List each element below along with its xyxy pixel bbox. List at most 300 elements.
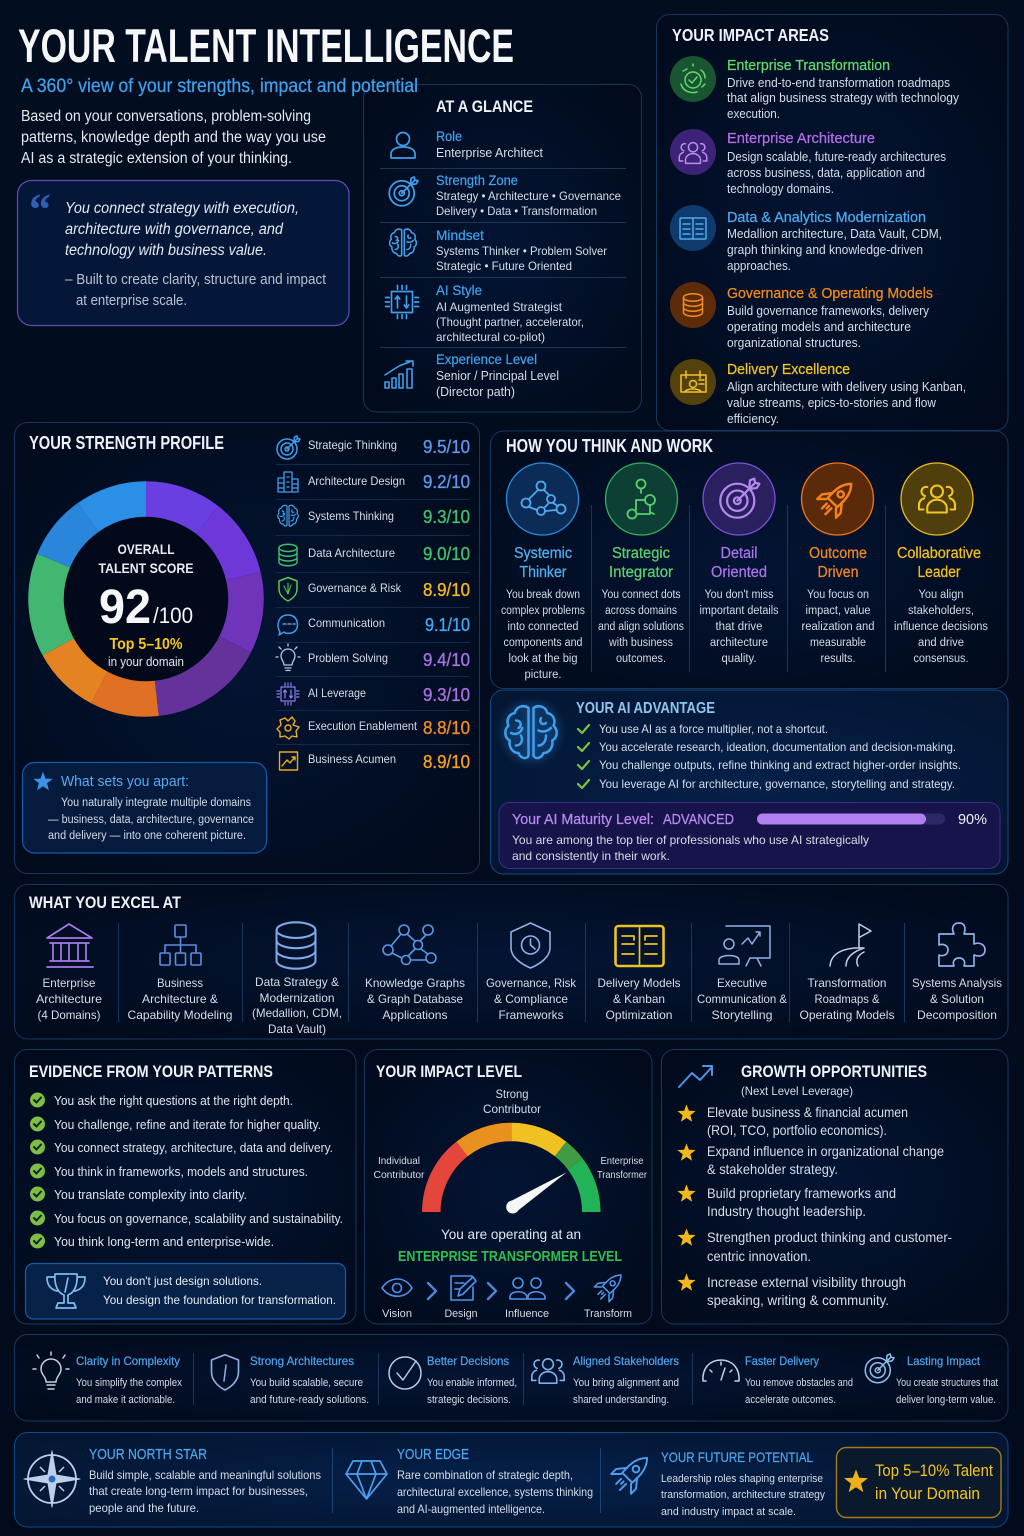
text: enterprise transformation bbox=[727, 57, 960, 121]
text: data strategy: Data Strategy & bbox=[255, 975, 339, 989]
text: executive communication: Storytelling bbox=[712, 1008, 772, 1022]
callout text: — business, data, architecture, governance bbox=[48, 814, 254, 826]
subheading: (Next Level Leverage) bbox=[741, 1084, 853, 1098]
text: future potential: Leadership roles shaping enterprise bbox=[661, 1473, 823, 1485]
text: experience level: Senior / Principal Level bbox=[436, 369, 559, 383]
text: aligned stakeholders bbox=[573, 1354, 679, 1406]
text: enterprise architecture: Enterprise bbox=[42, 976, 96, 990]
panel: at a glance bbox=[364, 84, 642, 412]
growth list: Build proprietary frameworks and bbox=[707, 1185, 896, 1201]
icon: database bbox=[277, 922, 315, 969]
icon: detail oriented bbox=[703, 463, 775, 535]
text: outcome driven: results. bbox=[820, 653, 856, 665]
icon: vision bbox=[382, 1279, 412, 1296]
text: strategic integrator: outcomes. bbox=[616, 653, 666, 665]
text: detail oriented: Oriented bbox=[711, 564, 767, 581]
text: collaborative leader: stakeholders, bbox=[908, 605, 974, 617]
text: strength zone: Strength Zone bbox=[436, 172, 518, 188]
heading: GROWTH OPPORTUNITIES bbox=[741, 1062, 927, 1081]
text: governance risk: Frameworks bbox=[498, 1008, 564, 1022]
callout text: You naturally integrate multiple domains bbox=[61, 797, 251, 809]
text: mindset bbox=[436, 227, 607, 273]
text: strategic integrator: You connect dots bbox=[602, 589, 681, 601]
heading: YOUR IMPACT AREAS bbox=[672, 25, 829, 45]
text: north star: people and the future. bbox=[89, 1501, 199, 1515]
ai maturity box bbox=[499, 802, 1000, 868]
icon: org chart bbox=[160, 925, 201, 965]
icon: governance shield bbox=[511, 923, 550, 968]
text: experience level: (Director path) bbox=[436, 385, 515, 399]
heading: YOUR STRENGTH PROFILE bbox=[29, 433, 224, 453]
heading: YOUR AI ADVANTAGE bbox=[576, 700, 715, 717]
icon: target bbox=[865, 1354, 894, 1383]
text: governance: organizational structures. bbox=[727, 336, 861, 350]
callout text bbox=[48, 773, 254, 842]
quote text: technology with business value. bbox=[65, 242, 267, 259]
level statement: You are operating at an bbox=[441, 1226, 581, 1242]
icon: systemic thinker bbox=[506, 463, 578, 535]
score row: execution enablement bbox=[277, 717, 470, 739]
text: systemic thinker: complex problems bbox=[501, 605, 585, 617]
text: enterprise architecture: Design scalable, future-ready architectures bbox=[727, 150, 946, 164]
icon: quote mark: “ bbox=[29, 185, 51, 234]
text: business architecture: Capability Modeling bbox=[128, 1008, 232, 1022]
icon: star bbox=[33, 772, 53, 790]
intro text: Based on your conversations, problem-solving bbox=[21, 108, 311, 125]
intro text: patterns, knowledge depth and the way you use bbox=[21, 129, 326, 146]
text: enterprise transformation: execution. bbox=[727, 107, 780, 121]
text: business architecture: Architecture & bbox=[142, 992, 218, 1006]
badge: top talent bbox=[836, 1448, 1001, 1518]
panel: benefits strip bbox=[14, 1334, 1008, 1421]
text: future potential: YOUR FUTURE POTENTIAL bbox=[661, 1449, 813, 1465]
text: faster delivery: You remove obstacles and bbox=[745, 1377, 853, 1389]
text: delivery bbox=[727, 361, 966, 426]
icon: collaborative leader bbox=[901, 463, 973, 535]
text: outcome driven: Driven bbox=[818, 564, 858, 581]
heading: HOW YOU THINK AND WORK bbox=[506, 436, 713, 456]
text: enterprise transformation: Drive end-to-end transformation roadmaps bbox=[727, 76, 950, 90]
evidence list: You think long-term and enterprise-wide. bbox=[54, 1235, 274, 1249]
text: experience level bbox=[436, 351, 559, 399]
growth list: (ROI, TCO, portfolio economics). bbox=[707, 1122, 887, 1138]
text: delivery models: & Kanban bbox=[613, 992, 665, 1006]
text: detail oriented: quality. bbox=[722, 653, 756, 665]
icon: influence bbox=[510, 1278, 545, 1299]
text: collaborative leader bbox=[894, 545, 988, 665]
gauge labels: Transformer bbox=[597, 1169, 647, 1181]
text: governance: Build governance frameworks, delivery bbox=[727, 304, 930, 318]
score: overall: TALENT SCORE bbox=[98, 560, 194, 576]
text: future potential: transformation, architecture strategy bbox=[661, 1489, 825, 1501]
icon: diamond bbox=[346, 1461, 387, 1499]
icon: design bbox=[451, 1276, 476, 1300]
growth list: Expand influence in organizational change bbox=[707, 1143, 944, 1159]
text: delivery models bbox=[598, 976, 680, 1022]
score row: business acumen: Business Acumen bbox=[308, 752, 396, 766]
icon: target bbox=[389, 177, 418, 206]
gauge labels: Contributor bbox=[483, 1102, 541, 1116]
icon: star bbox=[844, 1469, 868, 1492]
text: outcome driven: impact, value bbox=[806, 605, 870, 617]
gauge labels: Contributor bbox=[374, 1169, 425, 1181]
text: detail oriented: important details bbox=[700, 605, 779, 617]
badge text: in Your Domain bbox=[875, 1484, 980, 1503]
score row: execution enablement: Execution Enablement bbox=[308, 719, 418, 733]
panel: strength profile bbox=[14, 422, 480, 874]
text: better decisions: strategic decisions. bbox=[427, 1394, 511, 1406]
ai maturity box: and consistently in their work. bbox=[512, 849, 670, 863]
score row: business acumen: 8.9/10 bbox=[423, 752, 470, 772]
callout text bbox=[103, 1274, 336, 1307]
ai maturity box: ADVANCED bbox=[663, 811, 734, 828]
text: clarity: Clarity in Complexity bbox=[76, 1354, 180, 1368]
text: data analytics: graph thinking and knowledge-driven bbox=[727, 243, 923, 257]
score: overall: Top 5–10% bbox=[110, 636, 182, 653]
text: strategic integrator: Strategic bbox=[612, 545, 670, 562]
arrow bbox=[488, 1283, 496, 1299]
icon: growth arrow bbox=[679, 1066, 712, 1087]
score row: architecture design: Architecture Design bbox=[308, 474, 405, 488]
evidence list: You connect strategy, architecture, data and delivery. bbox=[54, 1141, 333, 1155]
text: ai style: AI Augmented Strategist bbox=[436, 300, 563, 314]
donut chart bbox=[46, 499, 246, 699]
text: faster delivery: accelerate outcomes. bbox=[745, 1394, 836, 1406]
advantage list: You use AI as a force multiplier, not a shortcut. bbox=[599, 722, 828, 736]
text: delivery: Align architecture with delivery using Kanban, bbox=[727, 380, 966, 394]
growth list: speaking, writing & community. bbox=[707, 1292, 889, 1308]
icon: architecture bbox=[670, 129, 716, 175]
step labels bbox=[382, 1308, 632, 1320]
text: systems analysis: Systems Analysis bbox=[912, 976, 1002, 990]
level statement: ENTERPRISE TRANSFORMER LEVEL bbox=[398, 1248, 622, 1265]
text: strategic integrator bbox=[598, 545, 684, 665]
text: north star: YOUR NORTH STAR bbox=[89, 1446, 207, 1463]
text: systemic thinker: components and bbox=[504, 637, 582, 649]
text: faster delivery bbox=[745, 1354, 853, 1406]
text: role bbox=[436, 128, 544, 160]
text: lasting impact: Lasting Impact bbox=[907, 1354, 981, 1368]
ai maturity box: You are among the top tier of professionals who use AI strategically bbox=[512, 833, 869, 847]
text: collaborative leader: influence decisions bbox=[894, 621, 988, 633]
callout text: What sets you apart: bbox=[61, 773, 189, 790]
title: YOUR TALENT INTELLIGENCE bbox=[18, 19, 514, 72]
panel: ai advantage bbox=[490, 690, 1008, 874]
icon: puzzle bbox=[939, 923, 985, 966]
text: enterprise architecture bbox=[36, 976, 102, 1022]
text: role: Enterprise Architect bbox=[436, 146, 544, 160]
text: delivery: efficiency. bbox=[727, 412, 779, 426]
callout text: and delivery — into one coherent picture. bbox=[48, 830, 246, 842]
icon: shield bbox=[212, 1355, 238, 1390]
score: overall: in your domain bbox=[108, 654, 184, 669]
icon: strategic integrator bbox=[606, 463, 678, 535]
panel: impact areas bbox=[656, 14, 1008, 430]
icon: outcome driven bbox=[802, 463, 874, 535]
growth list: Increase external visibility through bbox=[707, 1274, 906, 1290]
growth list: & stakeholder strategy. bbox=[707, 1161, 838, 1177]
text: enterprise architecture: Enterprise Architecture bbox=[727, 130, 875, 147]
text: transformation roadmaps: Operating Models bbox=[800, 1008, 894, 1022]
text: your edge: and AI-augmented intelligence. bbox=[397, 1502, 545, 1516]
text: future potential bbox=[661, 1449, 825, 1518]
gauge labels: Individual bbox=[378, 1155, 420, 1167]
quote text bbox=[65, 200, 299, 259]
text: delivery: value streams, epics-to-stories and flow bbox=[727, 396, 937, 410]
text: collaborative leader: Collaborative bbox=[897, 545, 981, 562]
score row: ai leverage: 9.3/10 bbox=[423, 685, 470, 705]
score row: problem solving bbox=[276, 644, 470, 670]
advantage list bbox=[599, 722, 961, 791]
subtitle: A 360° view of your strengths, impact and potential bbox=[21, 75, 418, 97]
text: collaborative leader: Leader bbox=[918, 564, 960, 581]
text: transformation roadmaps: Transformation bbox=[808, 976, 886, 990]
text: aligned stakeholders: Aligned Stakeholders bbox=[573, 1354, 679, 1368]
text: mindset: Systems Thinker • Problem Solver bbox=[436, 244, 607, 258]
growth list: Industry thought leadership. bbox=[707, 1203, 866, 1219]
ai maturity box: Your AI Maturity Level: bbox=[512, 811, 654, 828]
text: data analytics: Data & Analytics Modernization bbox=[727, 209, 926, 226]
text: experience level: Experience Level bbox=[436, 351, 537, 367]
text: your edge: Rare combination of strategic depth, bbox=[397, 1468, 573, 1482]
text: detail oriented: that drive bbox=[716, 621, 762, 633]
text: delivery: Delivery Excellence bbox=[727, 361, 850, 378]
heading: YOUR IMPACT LEVEL bbox=[376, 1062, 522, 1081]
text: ai style: AI Style bbox=[436, 282, 482, 298]
text: systemic thinker: into connected bbox=[508, 621, 578, 633]
text: role: Role bbox=[436, 128, 462, 144]
quote attribution bbox=[65, 272, 326, 309]
text: lasting impact bbox=[896, 1354, 998, 1406]
text: collaborative leader: You align bbox=[918, 589, 964, 601]
text: business architecture: Business bbox=[157, 976, 203, 990]
text: ai style bbox=[436, 282, 584, 344]
score row: problem solving: Problem Solving bbox=[308, 651, 388, 665]
text: your edge: YOUR EDGE bbox=[397, 1446, 469, 1463]
text: future potential: and industry impact at scale. bbox=[661, 1506, 796, 1518]
quote text: You connect strategy with execution, bbox=[65, 200, 299, 217]
panel: how you think and work bbox=[490, 431, 1008, 688]
score row: communication: Communication bbox=[308, 616, 385, 630]
quote attribution: – Built to create clarity, structure and impact bbox=[65, 272, 326, 288]
panel: impact level bbox=[364, 1050, 652, 1324]
text: detail oriented: Detail bbox=[720, 545, 758, 562]
text: enterprise transformation: Enterprise Transformation bbox=[727, 57, 890, 74]
score row: ai leverage: AI Leverage bbox=[308, 686, 366, 700]
text: data strategy bbox=[252, 975, 342, 1036]
text: executive communication: Communication & bbox=[697, 992, 787, 1006]
text: data strategy: (Medallion, CDM, bbox=[252, 1006, 342, 1020]
evidence list: You focus on governance, scalability and sustainability. bbox=[54, 1212, 343, 1226]
text: data analytics bbox=[727, 209, 942, 273]
text: systems analysis: & Solution bbox=[930, 992, 984, 1006]
text: mindset: Strategic • Future Oriented bbox=[436, 259, 572, 273]
text: north star: that create long-term impact for businesses, bbox=[89, 1484, 308, 1498]
callout text: You design the foundation for transformation. bbox=[103, 1293, 336, 1307]
text: executive communication bbox=[697, 976, 787, 1022]
text: aligned stakeholders: shared understanding. bbox=[573, 1394, 669, 1406]
icon: check circle bbox=[389, 1357, 421, 1389]
text: enterprise architecture bbox=[727, 130, 946, 196]
icon: presenter bbox=[719, 926, 770, 966]
text: strength zone bbox=[436, 172, 621, 218]
text: governance: Governance & Operating Models bbox=[727, 285, 933, 302]
text: aligned stakeholders: You bring alignment and bbox=[573, 1377, 679, 1389]
text: knowledge graphs: Knowledge Graphs bbox=[365, 976, 465, 990]
evidence list: You translate complexity into clarity. bbox=[54, 1188, 247, 1202]
score row: strategic thinking bbox=[277, 436, 470, 459]
score row: data architecture: 9.0/10 bbox=[423, 544, 470, 564]
score row: communication bbox=[278, 615, 470, 635]
text: detail oriented bbox=[700, 545, 779, 665]
score row: governance and risk: 8.9/10 bbox=[423, 580, 470, 600]
score: overall: OVERALL bbox=[118, 541, 175, 557]
text: north star bbox=[89, 1446, 321, 1515]
text: strength zone: Strategy • Architecture • Governance bbox=[436, 189, 621, 203]
score row: strategic thinking: 9.5/10 bbox=[423, 437, 470, 457]
icon: governance bbox=[670, 282, 716, 328]
icon: rocket bbox=[607, 1448, 657, 1498]
text: systems analysis: Decomposition bbox=[917, 1008, 997, 1022]
text: outcome driven: Outcome bbox=[809, 545, 867, 562]
icon: transform bbox=[592, 1268, 628, 1304]
score row: systems thinking bbox=[278, 505, 470, 527]
text: enterprise architecture: technology domains. bbox=[727, 182, 834, 196]
text: strategic integrator: and align solutions bbox=[598, 621, 684, 633]
arrow bbox=[428, 1283, 436, 1299]
text: systemic thinker: picture. bbox=[524, 669, 562, 681]
gauge labels: Strong bbox=[496, 1087, 528, 1101]
icon: brain bbox=[390, 229, 416, 256]
score row: governance and risk: Governance & Risk bbox=[308, 581, 402, 595]
icon: trophy bbox=[47, 1274, 85, 1308]
text: north star: Build simple, scalable and meaningful solutions bbox=[89, 1468, 321, 1482]
advantage list: You leverage AI for architecture, governance, storytelling and strategy. bbox=[599, 777, 955, 791]
step labels: Influence bbox=[505, 1308, 549, 1320]
text: data analytics: approaches. bbox=[727, 259, 791, 273]
text: collaborative leader: and drive bbox=[918, 637, 964, 649]
progress bar bbox=[757, 814, 945, 824]
text: strong architectures: and future-ready solutions. bbox=[250, 1394, 369, 1406]
icon: data analytics bbox=[670, 205, 716, 251]
score row: systems thinking: Systems Thinking bbox=[308, 509, 394, 523]
icon: chart bbox=[385, 361, 413, 388]
icon: chip bbox=[386, 286, 418, 318]
growth list: Strengthen product thinking and customer- bbox=[707, 1229, 952, 1245]
icon: delivery bbox=[670, 359, 716, 405]
score row: data architecture: Data Architecture bbox=[308, 546, 395, 560]
text: better decisions bbox=[427, 1354, 517, 1406]
step labels: Design bbox=[444, 1308, 478, 1320]
arrow bbox=[566, 1283, 574, 1299]
score row: strategic thinking: Strategic Thinking bbox=[308, 438, 397, 452]
text: clarity: and make it actionable. bbox=[76, 1394, 175, 1406]
text: transformation roadmaps: Roadmaps & bbox=[814, 992, 880, 1006]
panel: evidence bbox=[14, 1050, 356, 1324]
score: overall bbox=[98, 541, 194, 669]
score row: architecture design bbox=[278, 472, 470, 492]
callout: what sets you apart bbox=[22, 762, 266, 853]
score row: data architecture bbox=[279, 544, 470, 566]
score row: problem solving: 9.4/10 bbox=[423, 650, 470, 670]
text: outcome driven: measurable bbox=[810, 637, 866, 649]
heading: WHAT YOU EXCEL AT bbox=[29, 893, 182, 912]
text: detail oriented: You don't miss bbox=[704, 589, 774, 601]
evidence list: You ask the right questions at the right depth. bbox=[54, 1094, 293, 1108]
text: strong architectures: Strong Architectures bbox=[250, 1354, 354, 1368]
text: knowledge graphs bbox=[365, 976, 465, 1022]
text: your edge bbox=[397, 1446, 593, 1516]
growth list: centric innovation. bbox=[707, 1248, 811, 1264]
text: outcome driven bbox=[802, 545, 874, 665]
text: strategic integrator: Integrator bbox=[609, 564, 673, 581]
text: strong architectures bbox=[250, 1354, 369, 1406]
evidence list: You think in frameworks, models and structures. bbox=[54, 1165, 308, 1179]
text: lasting impact: You create structures that bbox=[896, 1377, 998, 1389]
icon: stakeholders bbox=[532, 1359, 564, 1383]
score row: communication: 9.1/10 bbox=[425, 615, 470, 635]
score row: business acumen bbox=[280, 752, 470, 772]
text: better decisions: You enable informed, bbox=[427, 1377, 517, 1389]
icon: kanban bbox=[616, 926, 664, 966]
panel: growth opportunities bbox=[662, 1050, 1008, 1324]
quote text: architecture with governance, and bbox=[65, 221, 284, 238]
text: better decisions: Better Decisions bbox=[427, 1354, 509, 1368]
text: enterprise architecture: (4 Domains) bbox=[38, 1008, 100, 1022]
callout: foundation bbox=[26, 1264, 346, 1319]
text: your edge: architectural excellence, systems thinking bbox=[397, 1485, 593, 1499]
text: transformation roadmaps bbox=[800, 976, 894, 1022]
badge text bbox=[875, 1461, 993, 1503]
heading: EVIDENCE FROM YOUR PATTERNS bbox=[29, 1062, 273, 1081]
text: enterprise transformation: that align business strategy with technology bbox=[727, 91, 960, 105]
intro text bbox=[21, 108, 326, 167]
score: overall: 92 bbox=[99, 581, 151, 634]
advantage list: You challenge outputs, refine thinking and extract higher-order insights. bbox=[599, 758, 961, 772]
text: systems analysis bbox=[912, 976, 1002, 1022]
text: executive communication: Executive bbox=[717, 976, 767, 990]
gauge labels bbox=[374, 1087, 647, 1181]
text: delivery models: Delivery Models bbox=[598, 976, 680, 990]
text: systemic thinker: look at the big bbox=[508, 653, 578, 665]
step labels: Transform bbox=[584, 1308, 632, 1320]
icon: person bbox=[391, 132, 415, 158]
text: mindset: Mindset bbox=[436, 227, 484, 243]
score row: architecture design: 9.2/10 bbox=[423, 472, 470, 492]
check marks bbox=[578, 725, 589, 788]
score row: governance and risk bbox=[279, 578, 470, 601]
text: governance: operating models and architecture bbox=[727, 320, 911, 334]
icon: compass bbox=[24, 1451, 80, 1507]
text: strength zone: Delivery • Data • Transformation bbox=[436, 204, 597, 218]
text: detail oriented: architecture bbox=[710, 637, 768, 649]
panel: quote bbox=[18, 180, 349, 326]
panel: what you excel at bbox=[14, 884, 1008, 1039]
step labels: Vision bbox=[382, 1308, 412, 1320]
growth list: Elevate business & financial acumen bbox=[707, 1104, 908, 1120]
score row: execution enablement: 8.8/10 bbox=[423, 718, 470, 738]
star icons bbox=[677, 1104, 696, 1291]
text: clarity: You simplify the complex bbox=[76, 1377, 182, 1389]
text: strategic integrator: across domains bbox=[605, 605, 677, 617]
text: enterprise architecture: across business, data, application and bbox=[727, 166, 925, 180]
text: systemic thinker: Systemic bbox=[514, 545, 572, 562]
gauge needle bbox=[506, 1172, 567, 1214]
icon: bulb bbox=[33, 1352, 69, 1389]
icon: knowledge graph bbox=[383, 925, 436, 964]
text: governance risk: Governance, Risk bbox=[486, 976, 577, 990]
ai maturity box: 90% bbox=[958, 811, 987, 828]
